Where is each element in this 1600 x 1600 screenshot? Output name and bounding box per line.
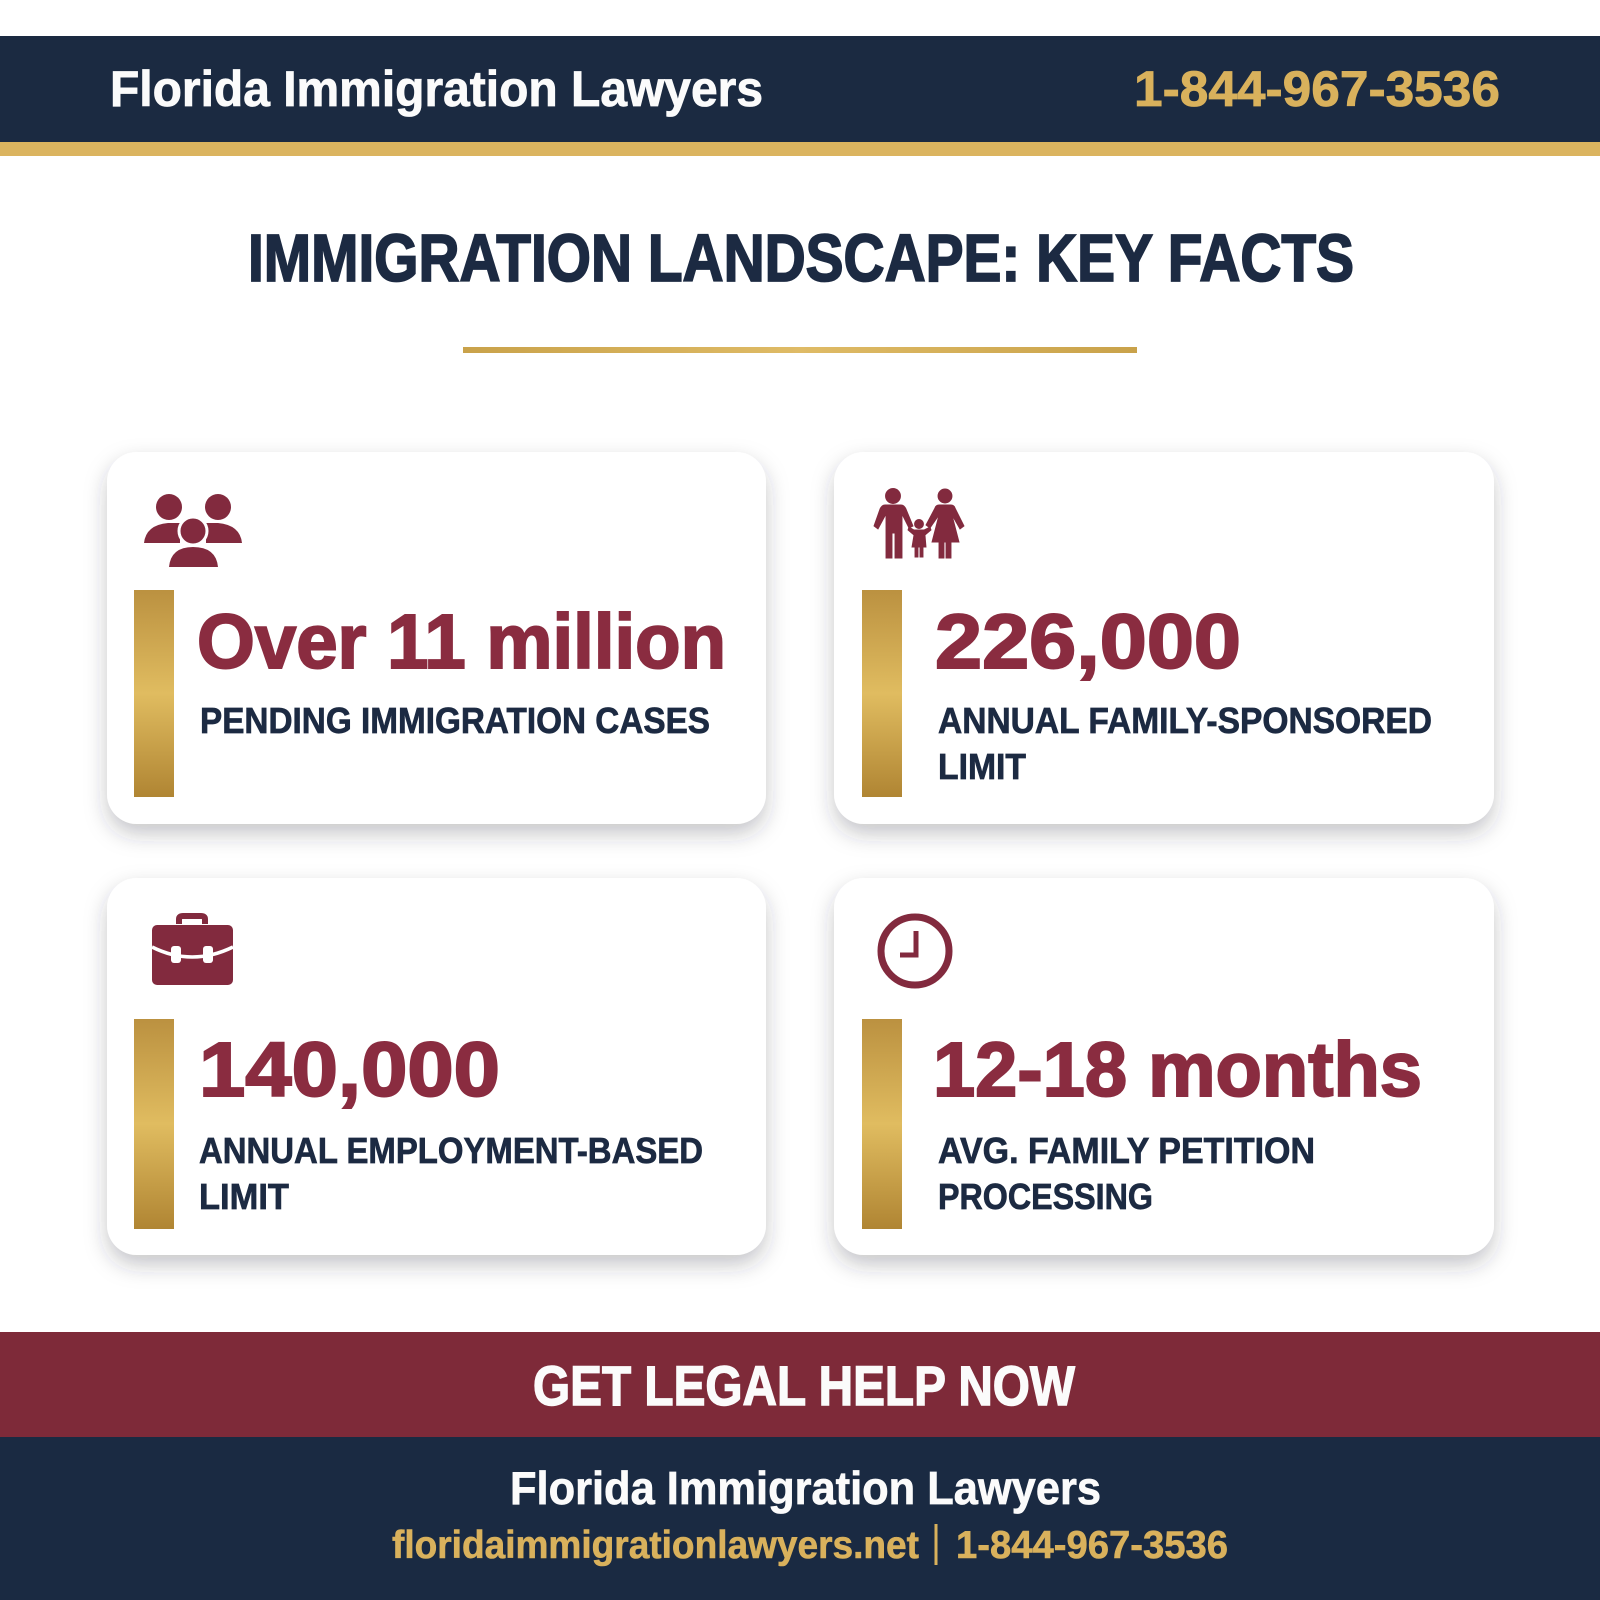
panel: pending cases — [107, 452, 766, 824]
header bar — [0, 36, 1600, 156]
label second line: PROCESSING — [938, 1176, 1153, 1217]
accent bar — [134, 1019, 174, 1229]
panel: employment-based limit — [107, 878, 766, 1255]
label: AVG. FAMILY PETITION — [938, 1130, 1315, 1171]
accent bar — [862, 1019, 902, 1229]
header firm name: Florida Immigration Lawyers — [110, 61, 763, 117]
label: PENDING IMMIGRATION CASES — [200, 700, 710, 741]
icon: clock — [881, 917, 949, 985]
footer firm name: Florida Immigration Lawyers — [510, 1462, 1101, 1514]
title divider — [463, 347, 1137, 353]
statistic: 140,000 — [199, 1027, 500, 1113]
statistic: 12-18 months — [933, 1027, 1422, 1113]
call to action text: GET LEGAL HELP NOW — [533, 1354, 1075, 1417]
call to action banner — [0, 1332, 1600, 1437]
statistic: 226,000 — [935, 599, 1241, 685]
label: ANNUAL FAMILY-SPONSORED — [938, 700, 1432, 741]
label: ANNUAL EMPLOYMENT-BASED — [199, 1130, 703, 1171]
label second line: LIMIT — [199, 1176, 289, 1217]
accent bar — [134, 590, 174, 797]
title: IMMIGRATION LANDSCAPE: KEY FACTS — [248, 221, 1354, 296]
icon: family — [874, 488, 964, 558]
accent bar — [862, 590, 902, 797]
header phone number: 1-844-967-3536 — [1134, 61, 1500, 117]
footer contact details: 1-844-967-3536 — [956, 1524, 1228, 1567]
footer contact details — [392, 1524, 1228, 1567]
label second line: LIMIT — [938, 746, 1026, 787]
panel: processing time — [834, 878, 1494, 1255]
footer contact details: floridaimmigrationlawyers.net — [392, 1524, 919, 1567]
statistic: Over 11 million — [197, 599, 726, 685]
footer — [0, 1437, 1600, 1600]
icon: group of people — [144, 494, 242, 567]
panel: family-sponsored limit — [834, 452, 1494, 824]
icon: briefcase — [152, 916, 233, 985]
